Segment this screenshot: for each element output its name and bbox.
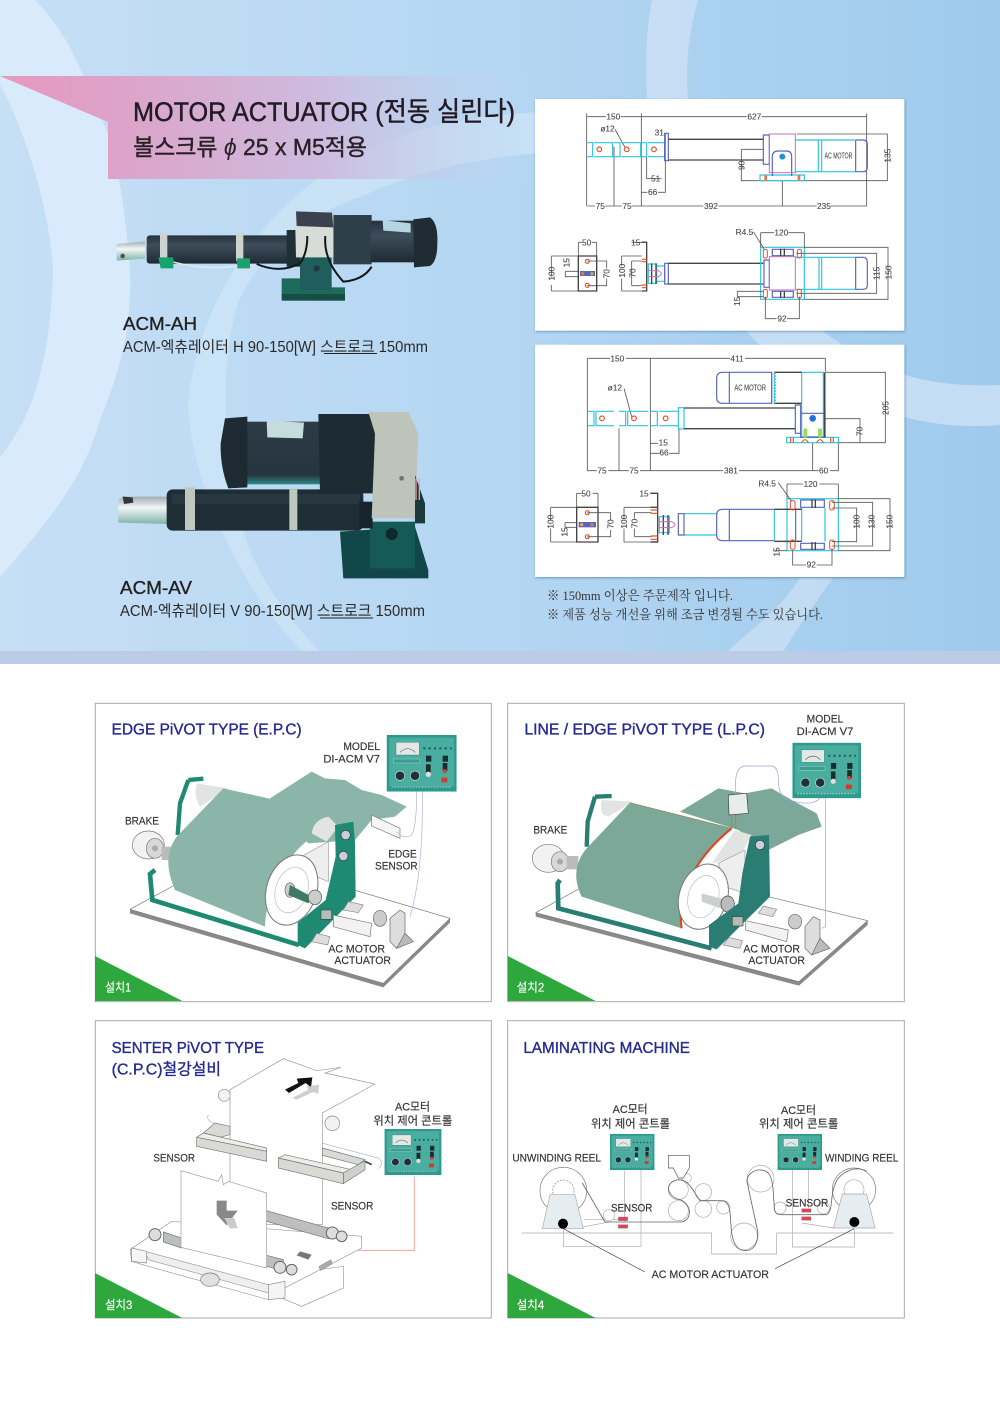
panel: AV technical drawing: 66 [659, 448, 669, 458]
panel: AH technical drawing: 50 [582, 237, 592, 247]
panel: AH technical drawing: 90 [736, 160, 746, 170]
panel: AH technical drawing: 51 [651, 173, 661, 183]
panel: AV technical drawing: 150 [885, 514, 895, 529]
label: ACM-AV: ACM-AV [120, 578, 192, 598]
photo: ACM-AV actuator [118, 412, 428, 578]
notes: ※ 150mm 이상은 주문제작 입니다. [547, 588, 733, 603]
panel: senter pivot type [95, 1021, 491, 1318]
panel: AH technical drawing: 115 [871, 266, 881, 280]
panel: AH technical drawing: AC MOTOR [825, 150, 852, 160]
panel: AH technical drawing: 150 [606, 111, 621, 121]
panel: AH technical drawing: 70 [601, 269, 611, 278]
panel: AH technical drawing: 31 [655, 128, 664, 138]
panel: laminating machine: AC MOTOR ACTUATOR [652, 1269, 769, 1281]
panel: AH technical drawing [535, 99, 904, 331]
panel: AH technical drawing: 66 [648, 187, 658, 197]
panel: edge pivot type: MODEL [343, 741, 380, 753]
panel: AH technical drawing: 92 [777, 314, 787, 324]
panel: AV technical drawing: 75 [597, 466, 607, 476]
panel: AH technical drawing: 150 [883, 265, 893, 279]
spec: ACM-AH: ACM-엑츄레이터 H 90-150[W] 스트로크 150mm [123, 338, 428, 356]
panel: AH technical drawing: 75 [596, 201, 605, 211]
panel: line edge pivot type: DI-ACM V7 [797, 726, 853, 738]
subtitle: 볼스크류 ϕ 25 x M5적용 [133, 134, 367, 160]
panel: line edge pivot type [508, 703, 904, 1002]
panel: AH technical drawing: 135 [882, 148, 892, 163]
notes [547, 588, 823, 622]
panel: AH technical drawing: ø12 [600, 124, 615, 134]
panel: AH technical drawing: 15 [732, 296, 742, 306]
panel: AH technical drawing: 120 [774, 228, 789, 238]
panel: AH technical drawing: 70 [627, 268, 637, 278]
panel: laminating machine: LAMINATING MACHINE [523, 1040, 690, 1057]
panel: edge pivot type: 설치1 [105, 981, 131, 995]
panel: AH technical drawing: 15 [631, 237, 641, 247]
panel: laminating machine: AC모터 [613, 1103, 648, 1116]
title ribbon [0, 76, 540, 179]
panel: senter pivot type: SENSOR [153, 1152, 195, 1164]
panel: laminating machine: UNWINDING REEL [512, 1152, 601, 1164]
panel: AH technical drawing: 15 [561, 258, 571, 267]
panel: AV technical drawing: 70 [605, 519, 615, 529]
panel: laminating machine: 위치 제어 콘트롤 [591, 1117, 670, 1130]
panel: AH technical drawing: R4.5 [736, 227, 754, 237]
photo: ACM-AH actuator [117, 211, 437, 301]
panel: AV technical drawing: AC MOTOR [734, 383, 766, 393]
panel: AV technical drawing: 75 [629, 466, 639, 476]
panel: AH technical drawing: 75 [622, 201, 632, 211]
panel: senter pivot type: AC모터 [395, 1101, 430, 1114]
panel: AV technical drawing: 15 [639, 489, 649, 499]
panel: senter pivot type: SENTER PiVOT TYPE [112, 1040, 264, 1057]
panel: AV technical drawing: 205 [880, 401, 890, 415]
panel: AV technical drawing: 60 [819, 466, 829, 476]
panel: line edge pivot type: MODEL [807, 713, 843, 725]
panel: edge pivot type: AC MOTOR [328, 943, 385, 955]
panel: AV technical drawing: 92 [807, 560, 816, 570]
panel: laminating machine [508, 1021, 904, 1318]
panel: senter pivot type: 위치 제어 콘트롤 [373, 1115, 452, 1128]
panel: AV technical drawing: ø12 [608, 383, 622, 393]
bottom band of header [0, 651, 1000, 664]
panel: senter pivot type: SENSOR [331, 1200, 373, 1212]
panel: laminating machine: WINDING REEL [825, 1152, 898, 1164]
panel: AV technical drawing: 100 [619, 514, 629, 529]
panel: senter pivot type: (C.P.C)철강설비 [112, 1061, 221, 1079]
panel: AV technical drawing: 50 [581, 489, 591, 499]
panel: line edge pivot type: LINE / EDGE PiVOT TYPE (L.P.C) [524, 721, 765, 738]
panel: edge pivot type: EDGE [388, 849, 417, 861]
panel: AV technical drawing: R4.5 [758, 478, 776, 488]
panel: line edge pivot type: AC MOTOR [743, 943, 800, 955]
title: MOTOR ACTUATOR (전동 실린다) [133, 97, 515, 127]
panel: AV technical drawing: 411 [730, 353, 744, 363]
panel: AV technical drawing: 100 [546, 514, 556, 529]
panel: laminating machine: SENSOR [611, 1202, 652, 1214]
panel: laminating machine: 설치4 [517, 1298, 545, 1312]
panel: edge pivot type: DI-ACM V7 [323, 754, 380, 766]
panel: AH technical drawing: 235 [817, 201, 831, 211]
panel: laminating machine: AC모터 [781, 1104, 816, 1117]
notes: ※ 제품 성능 개선을 위해 조금 변경될 수도 있습니다. [547, 607, 823, 622]
panel: AV technical drawing: 381 [724, 466, 738, 476]
panel: line edge pivot type: BRAKE [533, 824, 568, 836]
panel: AV technical drawing: 70 [629, 518, 639, 528]
panel: AH technical drawing: 627 [747, 111, 762, 121]
panel: line edge pivot type: ACTUATOR [748, 955, 805, 967]
panel: edge pivot type: EDGE PiVOT TYPE (E.P.C) [112, 721, 302, 738]
background [0, 0, 1000, 652]
panel: laminating machine: SENSOR [786, 1197, 828, 1209]
panel: AH technical drawing: 100 [546, 266, 556, 281]
panel: AV technical drawing: 100 [851, 514, 861, 529]
panel: senter pivot type: 설치3 [105, 1298, 133, 1312]
panel: AV technical drawing: 15 [559, 527, 569, 537]
panel: AV technical drawing: 15 [772, 547, 782, 557]
panel: edge pivot type: ACTUATOR [334, 955, 391, 967]
panel: AV technical drawing: 150 [610, 353, 625, 363]
panel: AV technical drawing [535, 345, 904, 577]
panel: line edge pivot type: 설치2 [517, 981, 545, 995]
panel: AV technical drawing: 130 [867, 514, 877, 529]
panel: edge pivot type [95, 703, 491, 1002]
panel: AH technical drawing: 392 [704, 201, 718, 211]
spec: ACM-AV: ACM-엑츄레이터 V 90-150[W] 스트로크 150mm [120, 602, 425, 620]
panel: edge pivot type: SENSOR [375, 860, 418, 872]
panel: edge pivot type: BRAKE [125, 815, 159, 827]
panel: laminating machine: 위치 제어 콘트롤 [759, 1117, 838, 1130]
panel: AV technical drawing: 120 [804, 479, 818, 489]
label: ACM-AH: ACM-AH [123, 314, 197, 334]
panel: AV technical drawing: 15 [659, 438, 668, 448]
panel: AV technical drawing: 70 [855, 426, 865, 436]
panel: AH technical drawing: 100 [617, 263, 627, 278]
